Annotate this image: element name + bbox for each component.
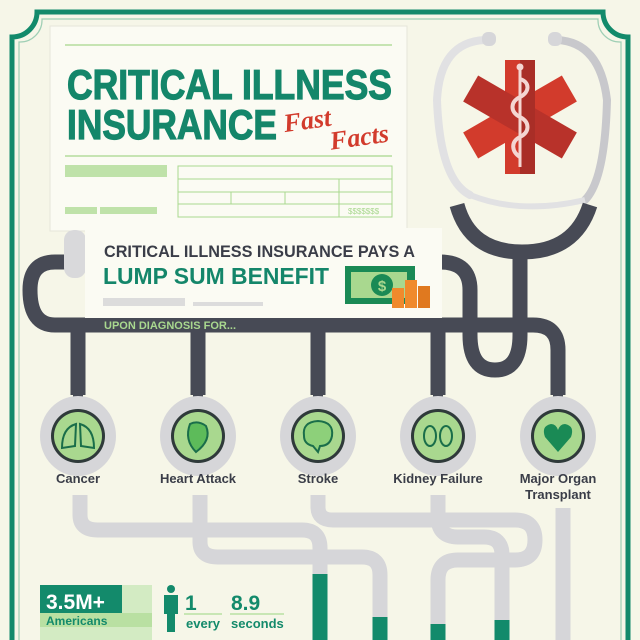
condition: stroke: Stroke (298, 471, 338, 486)
stat: 1 every 8.9 seconds: 8.9 (231, 592, 260, 615)
title text (67, 61, 392, 148)
lump sum card: LUMP SUM BENEFIT (103, 263, 329, 289)
stat: 1 every 8.9 seconds: every (186, 616, 221, 631)
title text: INSURANCE (67, 101, 277, 148)
form lines (65, 165, 167, 214)
green fill bars (312, 574, 510, 640)
stethoscope (437, 32, 607, 252)
title text: CRITICAL ILLNESS (67, 61, 392, 108)
paper card: title (50, 26, 407, 231)
condition: kidney failure: Kidney Failure (393, 471, 483, 486)
stat: 3.5M+ Americans: Americans (46, 614, 108, 628)
band: upon diagnosis: UPON DIAGNOSIS FOR... (104, 320, 236, 332)
fast facts: Facts (327, 119, 391, 156)
light pipes (80, 495, 563, 640)
condition: heart attack: Heart Attack (160, 471, 237, 486)
condition: organ transplant: Major Organ (520, 471, 596, 486)
condition: kidney failure (393, 380, 483, 486)
stat: 3.5M+ Americans (40, 585, 152, 640)
condition: heart attack (160, 380, 237, 486)
icon: money (345, 266, 430, 308)
condition: organ transplant (520, 380, 596, 502)
stat: 1 every 8.9 seconds (164, 585, 284, 632)
stat: 3.5M+ Americans: 3.5M+ (46, 591, 105, 614)
lump sum card: CRITICAL ILLNESS INSURANCE PAYS A (104, 242, 415, 261)
fast facts (281, 103, 391, 156)
condition: cancer (40, 380, 116, 486)
dark tubes (30, 250, 558, 395)
condition: organ transplant: Transplant (525, 487, 592, 502)
icon: medical star (463, 60, 577, 174)
condition: cancer: Cancer (56, 471, 100, 486)
stat: 1 every 8.9 seconds: 1 (185, 592, 197, 615)
stat: 1 every 8.9 seconds: seconds (231, 616, 284, 631)
condition: stroke (280, 380, 356, 486)
band: upon diagnosis (85, 318, 442, 332)
lump sum card (64, 228, 442, 318)
icon: money: $ (378, 278, 387, 295)
paper card: title: $$$$$$$ (348, 207, 380, 216)
fast facts: Fast (281, 103, 334, 138)
